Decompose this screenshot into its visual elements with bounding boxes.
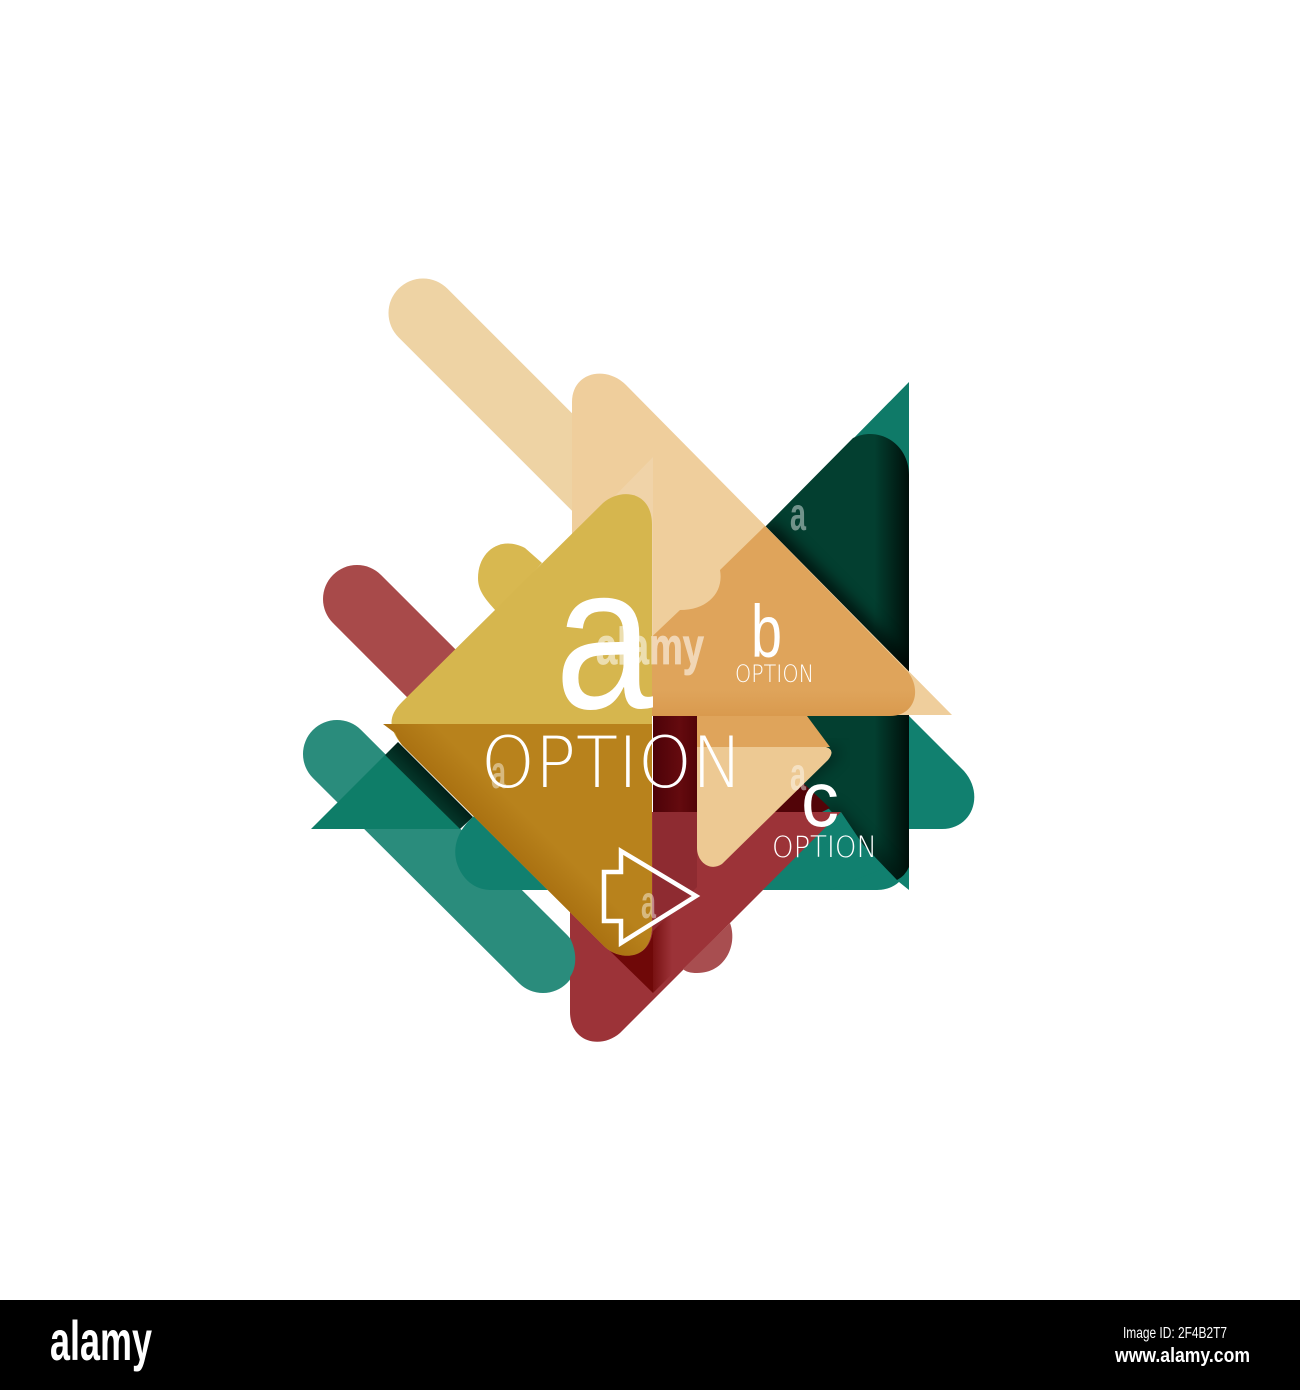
teal lower diagonal bar (337, 754, 543, 959)
watermark a bottom: a (641, 876, 656, 928)
teal wedge corner below band (763, 812, 880, 890)
red band dark fade at divider (653, 912, 672, 993)
watermark a top right: a (790, 488, 806, 540)
dark maroon wedge under diamond (610, 930, 653, 993)
letter c: c (801, 755, 839, 843)
letter b: b (751, 590, 782, 673)
teal triangle left tip (311, 755, 460, 829)
darker red panel left of band (653, 812, 697, 931)
label: option b (735, 590, 814, 688)
watermark a mid right: a (790, 748, 806, 800)
watermark marks (491, 488, 806, 928)
label: option c (772, 755, 877, 864)
cream large rounded triangle (572, 374, 952, 715)
footer bar (0, 1300, 1300, 1390)
cream small rounded triangle (697, 747, 832, 867)
teal bar overlay on red (570, 938, 575, 977)
maroon overlap (653, 716, 830, 812)
cream lighter inner panel (572, 457, 653, 640)
word OPTION large: OPTION (481, 722, 743, 804)
letter a: a (555, 523, 654, 752)
footer logo alamy: alamy (50, 1309, 152, 1372)
teal rounded shape mid (455, 800, 590, 890)
word OPTION small b: OPTION (735, 660, 814, 688)
image id: Image ID: 2F4B2T7 (1123, 1325, 1227, 1342)
red rounded triangle (570, 812, 841, 1042)
arrow outline icon (604, 851, 696, 943)
cluster: geometric arrow composition (311, 313, 974, 1042)
dark green shadow (765, 527, 915, 880)
teal right rounded triangle (905, 712, 974, 829)
word OPTION small c: OPTION (772, 830, 877, 864)
orange triangle (640, 526, 915, 716)
teal lower rounded panel (763, 800, 909, 890)
infographic canvas (0, 278, 1300, 1390)
website: www.alamy.com (1114, 1345, 1250, 1367)
watermark a mid left: a (491, 746, 506, 798)
yellow rounded diamond (392, 494, 652, 956)
red circle bump (683, 923, 732, 973)
red upper diagonal bar (357, 599, 500, 742)
label: option a (481, 523, 743, 804)
gold triangle overlay (383, 724, 652, 956)
yellow circle bump (478, 544, 542, 612)
dark green rounded triangle (765, 434, 909, 880)
cream diagonal bar (423, 313, 700, 590)
watermark alamy center: alamy (596, 618, 704, 676)
orange band above cream small triangle (697, 716, 830, 747)
dark green strip under gold diamond (385, 742, 473, 829)
teal top tip of right triangle (845, 382, 909, 480)
